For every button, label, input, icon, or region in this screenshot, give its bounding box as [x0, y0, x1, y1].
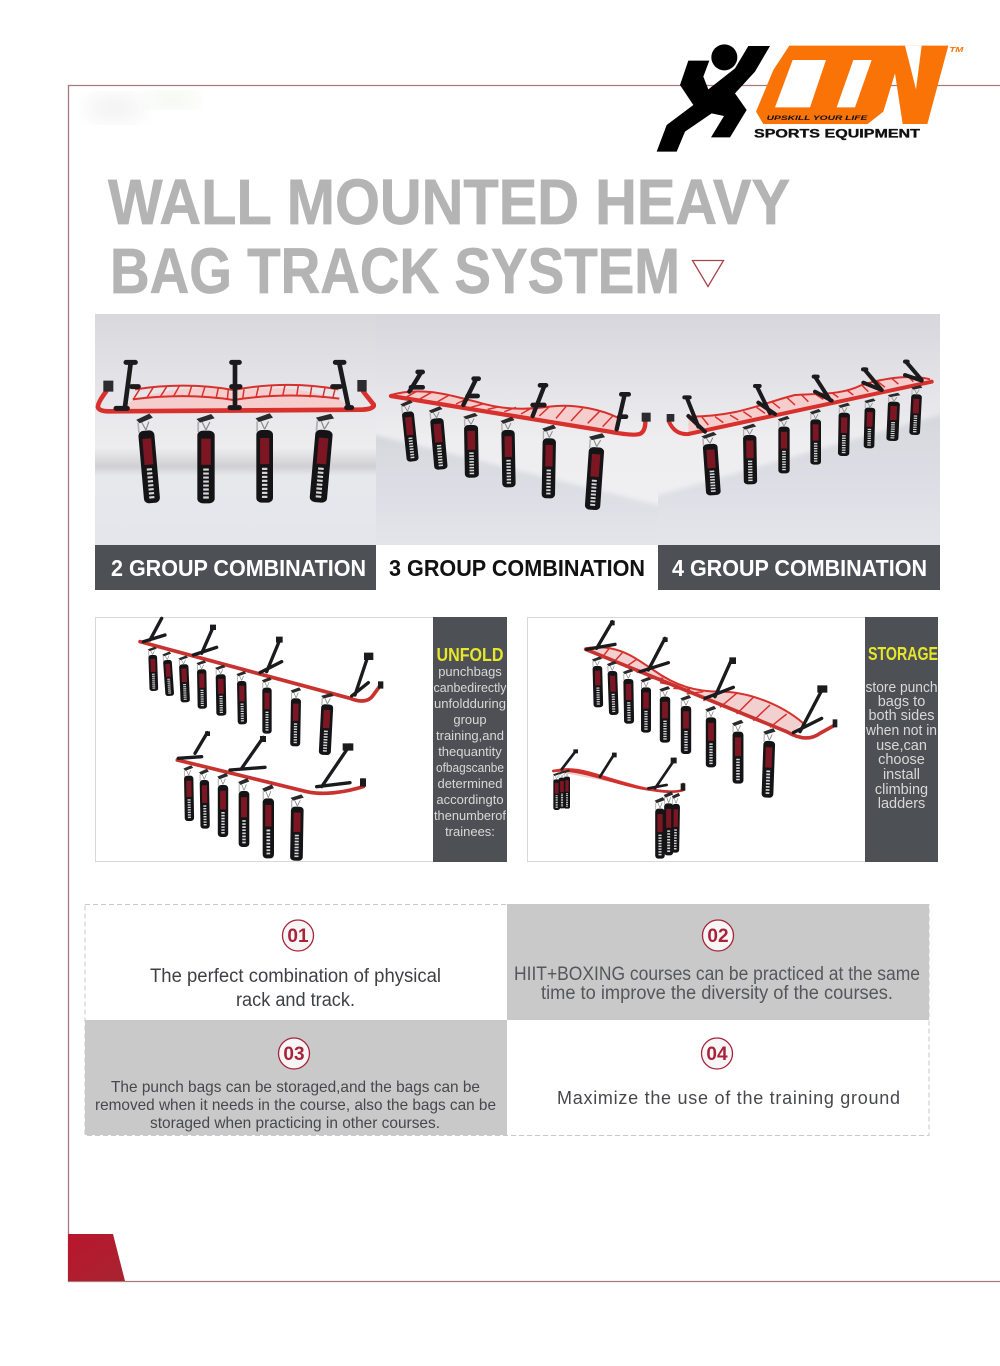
caption: 3 GROUP COMBINATION — [389, 555, 645, 581]
feature 04: Maximize the use of the training ground — [557, 1088, 900, 1108]
feature 01 — [150, 920, 441, 1011]
caption — [95, 545, 376, 590]
text block: unfold: UNFOLD — [436, 645, 504, 665]
text block: unfold: thequantity — [438, 744, 502, 759]
feature 03: 03 — [283, 1044, 305, 1065]
text block: unfold — [433, 617, 507, 862]
panel: storage — [528, 617, 938, 862]
feature 01: 01 — [287, 926, 309, 947]
text block: storage: install — [883, 767, 920, 783]
wordmark: CON: UPSKILL YOUR LIFE — [767, 115, 869, 122]
text block: unfold: group — [453, 712, 487, 727]
rack with ladder — [98, 362, 374, 504]
text block: storage — [865, 617, 938, 862]
text block: unfold: training,and — [436, 728, 504, 743]
feature 02: HIIT+BOXING courses can be practiced at the same — [514, 964, 920, 985]
title: WALL MOUNTED HEAVY — [108, 166, 790, 238]
text block: storage: ladders — [878, 796, 925, 812]
text block: storage: choose — [878, 752, 925, 768]
text block: storage: store punch — [866, 680, 938, 696]
panel: 4 group combination — [658, 314, 940, 590]
feature 03: The punch bags can be storaged,and the bags can be — [111, 1079, 480, 1096]
caption — [376, 545, 658, 590]
tagline: SPORTS EQUIPMENT — [754, 126, 921, 140]
text block: unfold: canbedirectly — [434, 680, 507, 695]
text block: storage: STORAGE — [868, 644, 938, 664]
panel: 3 group combination — [376, 314, 658, 576]
feature 04: 04 — [706, 1044, 728, 1065]
panel: 2 group combination — [95, 314, 376, 590]
text block: unfold: punchbags — [438, 664, 502, 679]
text block: storage: bags to — [878, 694, 925, 710]
icon: running figure — [657, 44, 770, 152]
text block: unfold: unfoldduring — [434, 696, 506, 711]
text block: unfold: thenumberof — [434, 808, 506, 823]
text block: unfold: ofbagscanbe — [436, 760, 504, 775]
feature 03: removed when it needs in the course, also the bags can be — [95, 1097, 496, 1114]
feature 02 — [514, 920, 920, 1004]
text block: storage: when not in — [865, 723, 937, 739]
illustration: two unfolded racks — [140, 618, 383, 861]
text block: unfold: trainees: — [445, 824, 495, 839]
text block: storage: both sides — [868, 708, 935, 724]
illustration: racks with ladders — [553, 621, 837, 859]
corner accent — [68, 1234, 125, 1281]
wordmark: CON: TM — [949, 45, 964, 54]
wordmark: CON — [756, 45, 964, 124]
text block: unfold: accordingto — [436, 792, 504, 807]
feature 03: storaged when practicing in other courses. — [150, 1115, 440, 1132]
feature 03 — [95, 1038, 496, 1132]
title: BAG TRACK SYSTEM — [110, 235, 680, 307]
logo — [657, 44, 964, 152]
caption: 2 GROUP COMBINATION — [111, 555, 366, 581]
caption — [658, 545, 940, 590]
title — [108, 166, 790, 307]
text block: storage: climbing — [875, 782, 928, 798]
punch bags — [136, 413, 334, 504]
text block: storage: use,can — [876, 738, 927, 754]
feature 01: rack and track. — [236, 990, 355, 1011]
feature 01: The perfect combination of physical — [150, 966, 441, 987]
text block: unfold: determined — [437, 776, 503, 791]
feature 04 — [557, 1038, 900, 1108]
feature 02: 02 — [707, 926, 729, 947]
feature grid — [85, 904, 929, 1136]
feature 02: time to improve the diversity of the courses. — [541, 983, 893, 1004]
icon: down triangle — [692, 260, 724, 286]
caption: 4 GROUP COMBINATION — [672, 555, 927, 581]
panel: unfold — [96, 617, 507, 862]
